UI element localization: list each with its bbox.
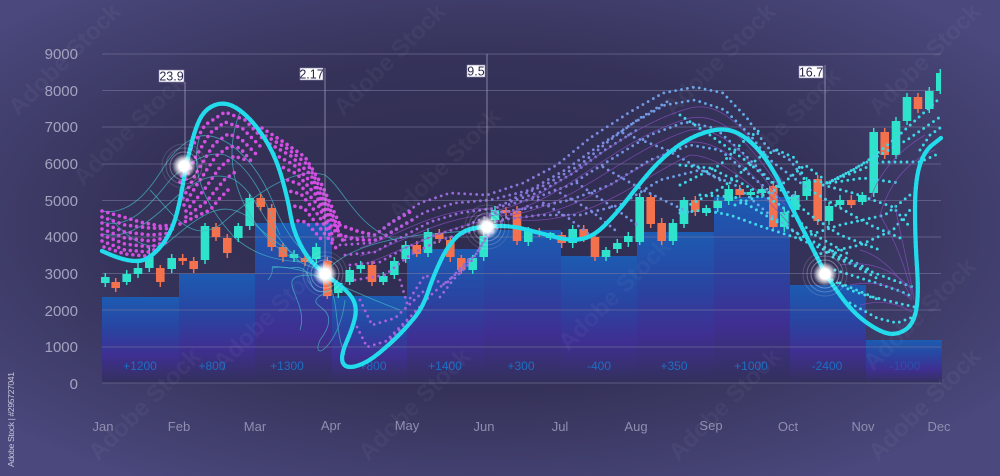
stock watermarks: Adobe Stock [663, 343, 787, 466]
cyan dot lattice: Sep to Dec [680, 98, 940, 323]
glow marker: Oct [803, 252, 847, 296]
y axis labels [45, 46, 78, 393]
bar value labels: +1400 [428, 359, 462, 373]
bar value labels: +300 [507, 359, 535, 373]
stock watermarks: Adobe Stock [83, 343, 207, 466]
stock watermarks: Adobe Stock [863, 0, 987, 121]
bar value labels: +800 [198, 359, 226, 373]
glow marker: Apr [303, 252, 347, 296]
bar value labels: +800 [359, 359, 387, 373]
bar value labels: -400 [587, 359, 611, 373]
y axis labels: 1000 [45, 339, 78, 356]
thin magenta contour lines: Nov to Dec [840, 135, 935, 312]
stock watermarks: Adobe Stock [68, 68, 192, 191]
thin purple contour lines: Jun to Oct [360, 107, 790, 262]
glow marker: Feb [162, 144, 206, 188]
grid lines [102, 54, 941, 383]
bar value labels: -1000 [890, 359, 921, 373]
bar value labels: +1300 [270, 359, 304, 373]
stock watermarks: Adobe Stock [553, 233, 677, 356]
month labels: Sep [699, 418, 723, 433]
month labels: Jun [474, 419, 494, 434]
glow marker: Jun [465, 205, 509, 249]
month labels: Dec [927, 419, 951, 434]
bar value labels: +350 [660, 359, 688, 373]
y axis labels: 8000 [45, 83, 78, 100]
leader line and label: 23.9: 23.9 [159, 70, 184, 84]
stock watermarks: Adobe Stock [328, 0, 452, 121]
month labels [93, 418, 951, 434]
month labels: Nov [851, 419, 875, 434]
bar value labels: +1000 [734, 359, 768, 373]
leader line and label: 16.7: 16.7 [799, 66, 823, 80]
stock watermarks: Adobe Stock [858, 253, 982, 376]
month labels: Aug [624, 419, 648, 434]
bar value labels: -2400 [812, 359, 843, 373]
leader line and label: 16.7 [799, 65, 825, 274]
month labels: Oct [778, 419, 798, 434]
y axis labels: 2000 [45, 303, 78, 320]
month labels: Feb [168, 419, 190, 434]
leader line and label: 2.17 [299, 68, 325, 274]
magenta dot surface: Jan to Apr [102, 112, 412, 256]
y axis labels: 7000 [45, 119, 78, 136]
y axis labels: 6000 [45, 156, 78, 173]
leader line and label: 23.9 [159, 70, 185, 166]
y axis labels: 3000 [45, 266, 78, 283]
stock watermarks: Adobe Stock [3, 0, 127, 121]
stock watermarks: Adobe Stock [723, 63, 847, 186]
month labels: Jan [93, 419, 113, 434]
month labels: Mar [244, 419, 267, 434]
stock id: Adobe Stock | #295727041 [6, 372, 16, 467]
bar value labels: +1200 [123, 359, 157, 373]
stock watermarks: Adobe Stock [383, 103, 507, 226]
leader line and label: 9.5: 9.5 [467, 64, 485, 78]
purple-blue dot wave family: Apr to Oct [340, 87, 810, 347]
leader line and label: 9.5 [467, 54, 487, 227]
y axis labels: 0 [70, 376, 78, 393]
month labels: Apr [321, 418, 342, 433]
stock watermarks: Adobe Stock [208, 253, 332, 376]
candlesticks: up [105, 69, 941, 298]
month labels: May [395, 418, 420, 433]
y axis labels: 5000 [45, 193, 78, 210]
main cyan trend line [102, 104, 941, 367]
leader line and label: 2.17: 2.17 [299, 68, 324, 82]
y axis labels: 4000 [45, 229, 78, 246]
teal wire mesh: Jan to Apr [102, 112, 487, 355]
candlesticks: down [116, 93, 918, 299]
stock watermarks: Adobe Stock [863, 343, 987, 466]
stock watermarks: Adobe Stock [353, 343, 477, 466]
monthly bars [102, 197, 942, 383]
y axis labels: 9000 [45, 46, 78, 63]
bar value labels [123, 359, 921, 373]
stock watermarks: Adobe Stock [658, 0, 782, 121]
month labels: Jul [552, 419, 568, 434]
